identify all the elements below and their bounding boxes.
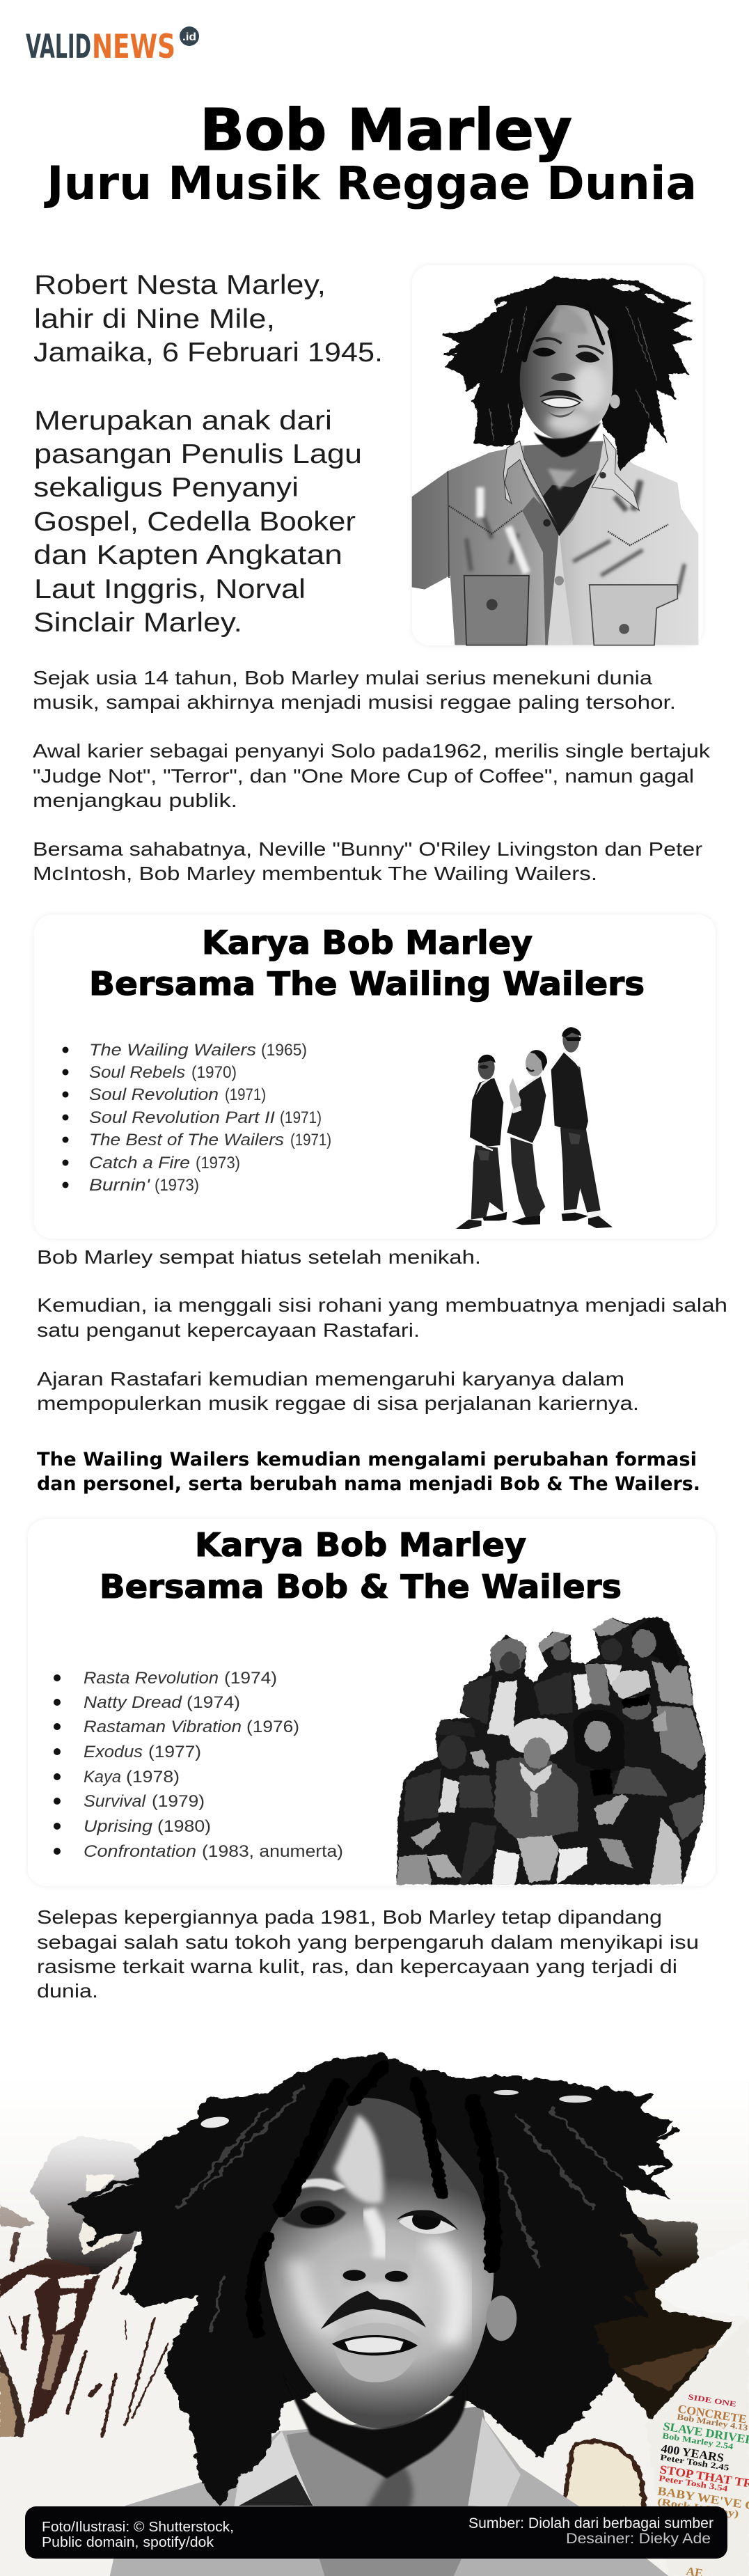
intro text block bbox=[33, 270, 383, 638]
list: Wailing Wailers albums: (1971) bbox=[225, 1085, 266, 1104]
record sleeve track list: 400 YEARS bbox=[660, 2442, 725, 2465]
intro text block: Merupakan anak dari bbox=[34, 406, 332, 436]
intro text block: Laut Inggris, Norval bbox=[34, 574, 306, 604]
list: Bob & The Wailers albums: (1974) bbox=[187, 1693, 240, 1712]
heading: Wailing Wailers works: Bersama The Wailing Wailers bbox=[89, 965, 645, 1003]
paragraph: early career: McIntosh, Bob Marley membentuk The Wailing Wailers. bbox=[33, 863, 597, 884]
list: Wailing Wailers albums: Soul Rebels bbox=[89, 1063, 185, 1082]
list: Wailing Wailers albums: The Wailing Wailers bbox=[89, 1041, 256, 1060]
paragraph: early career: musik, sampai akhirnya menjadi musisi reggae paling tersohor. bbox=[33, 691, 676, 713]
list: Wailing Wailers albums: (1965) bbox=[261, 1041, 307, 1060]
list: Wailing Wailers albums: (1970) bbox=[191, 1063, 237, 1082]
portrait photo bbox=[412, 276, 698, 645]
figure: right man bbox=[551, 1027, 613, 1228]
list: Wailing Wailers albums: Soul Revolution bbox=[89, 1085, 219, 1104]
paragraph: legacy: sebagai salah satu tokoh yang berpengaruh dalam menyikapi isu bbox=[37, 1931, 699, 1953]
record sleeve track list: CONCRETE bbox=[677, 2402, 748, 2426]
top row heads bbox=[489, 1639, 527, 1671]
heading: Bob & The Wailers works: Karya Bob Marley bbox=[195, 1526, 526, 1564]
photo: Bob & The Wailers group bbox=[397, 1617, 705, 1885]
list: Bob & The Wailers albums: Uprising bbox=[84, 1817, 153, 1836]
list: Wailing Wailers albums: Soul Revolution Part II bbox=[89, 1108, 275, 1127]
list: Wailing Wailers albums: Catch a Fire bbox=[89, 1154, 190, 1172]
panel: works with Bob & The Wailers bbox=[28, 1519, 716, 1886]
list: Bob & The Wailers albums: (1974) bbox=[224, 1669, 277, 1688]
list: Bob & The Wailers albums: Exodus bbox=[84, 1743, 143, 1761]
list: Bob & The Wailers albums: (1980) bbox=[157, 1817, 211, 1836]
bold statement: dan personel, serta berubah nama menjadi Bob & The Wailers. bbox=[37, 1473, 700, 1495]
paragraph: Rastafari bbox=[37, 1246, 727, 1414]
paragraph: Rastafari: Ajaran Rastafari kemudian memengaruhi karyanya dalam bbox=[37, 1368, 624, 1390]
hands bbox=[594, 1794, 629, 1824]
title: Bob Marley bbox=[200, 97, 572, 164]
shirt and neck bbox=[110, 2405, 668, 2576]
paragraph: legacy bbox=[37, 1906, 699, 2002]
record sleeve track list: (Rock It Baby) bbox=[656, 2497, 740, 2520]
bold statement bbox=[37, 1449, 700, 1495]
list: Bob & The Wailers albums: Natty Dread bbox=[84, 1693, 182, 1712]
mural portrait bbox=[72, 2055, 676, 2576]
list: Bob & The Wailers albums bbox=[54, 1669, 343, 1861]
list: Wailing Wailers albums: (1971) bbox=[290, 1131, 331, 1149]
footer credits bar bbox=[25, 2506, 727, 2559]
photo: The Wailing Wailers trio bbox=[456, 1027, 613, 1229]
front row heads bbox=[435, 1720, 475, 1737]
paragraph: early career bbox=[33, 667, 711, 884]
list: Wailing Wailers albums: The Best of The Wailers bbox=[89, 1131, 284, 1149]
title bbox=[44, 97, 697, 210]
heading: Bob & The Wailers works: Bersama Bob & The Wailers bbox=[100, 1568, 622, 1605]
paragraph: legacy: dunia. bbox=[37, 1980, 98, 2002]
intro text block: Jamaika, 6 Februari 1945. bbox=[33, 338, 383, 368]
front locks bbox=[253, 2067, 493, 2333]
photo credit: Foto/Ilustrasi: © Shutterstock, bbox=[42, 2520, 234, 2535]
record sleeve track list: Peter Tosh 2.45 bbox=[660, 2452, 730, 2473]
list: Wailing Wailers albums: Burnin' bbox=[89, 1176, 151, 1195]
record sleeve track list: Bob Marley 4.13 bbox=[677, 2412, 748, 2433]
intro text block: Robert Nesta Marley, bbox=[34, 270, 326, 300]
hair bbox=[72, 2055, 676, 2506]
paragraph: Rastafari: Kemudian, ia menggali sisi rohani yang membuatnya menjadi salah bbox=[37, 1294, 727, 1316]
list: Bob & The Wailers albums: Rastaman Vibration bbox=[84, 1718, 242, 1736]
paragraph: Rastafari: mempopulerkan musik reggae di sisa perjalanan kariernya. bbox=[37, 1392, 639, 1414]
paragraph: early career: "Judge Not", "Terror", dan "One More Cup of Coffee", namun gagal bbox=[33, 765, 694, 787]
source and designer: Sumber: Diolah dari berbagai sumber bbox=[468, 2515, 713, 2531]
list: Bob & The Wailers albums: Kaya bbox=[84, 1768, 121, 1786]
list: Bob & The Wailers albums: (1976) bbox=[246, 1718, 299, 1736]
list: Bob & The Wailers albums: (1979) bbox=[152, 1792, 205, 1811]
paragraph: early career: menjangkau publik. bbox=[33, 790, 237, 811]
panel: works with The Wailing Wailers bbox=[34, 915, 716, 1239]
title: Juru Musik Reggae Dunia bbox=[44, 157, 697, 210]
photo credit bbox=[42, 2520, 234, 2550]
paragraph: early career: Sejak usia 14 tahun, Bob Marley mulai serius menekuni dunia bbox=[33, 667, 652, 689]
source and designer bbox=[468, 2515, 713, 2547]
hair gaps bbox=[200, 2090, 592, 2130]
list: Bob & The Wailers albums: (1977) bbox=[148, 1743, 201, 1761]
list: Bob & The Wailers albums: Survival bbox=[84, 1792, 146, 1811]
record sleeve track list: SIDE ONE bbox=[688, 2393, 737, 2409]
figure: left man bbox=[456, 1055, 507, 1229]
intro text block: Sinclair Marley. bbox=[33, 608, 242, 638]
heading: Wailing Wailers works: Karya Bob Marley bbox=[202, 924, 533, 961]
intro text block: Gospel, Cedella Booker bbox=[33, 507, 356, 537]
heading: Bob & The Wailers works bbox=[100, 1526, 622, 1605]
illustration: Bob Marley mural with collage background bbox=[0, 2005, 749, 2576]
list: Wailing Wailers albums: (1971) bbox=[280, 1108, 322, 1127]
intro text block: sekaligus Penyanyi bbox=[33, 473, 299, 503]
list: Bob & The Wailers albums: (1978) bbox=[126, 1768, 180, 1786]
paragraph: legacy: rasisme terkait warna kulit, ras, dan kepercayaan yang terjadi di bbox=[37, 1956, 677, 1977]
paragraph: early career: Bersama sahabatnya, Neville "Bunny" O'Riley Livingston dan Peter bbox=[33, 838, 702, 860]
list: Wailing Wailers albums bbox=[63, 1041, 331, 1195]
intro text block: pasangan Penulis Lagu bbox=[34, 439, 362, 469]
paragraph: Rastafari: satu penganut kepercayaan Rastafari. bbox=[37, 1319, 420, 1341]
paragraph: legacy: Selepas kepergiannya pada 1981, Bob Marley tetap dipandang bbox=[37, 1906, 662, 1928]
record sleeve track list: Bob Marley 2.54 bbox=[662, 2430, 734, 2451]
collage background bbox=[0, 2005, 749, 2576]
clothing highlights bbox=[487, 1680, 517, 1736]
paragraph: early career: Awal karier sebagai penyanyi Solo pada1962, merilis single bertajuk bbox=[33, 740, 711, 762]
photo credit: Public domain, spotify/dok bbox=[42, 2535, 214, 2550]
bold statement: The Wailing Wailers kemudian mengalami perubahan formasi bbox=[37, 1449, 697, 1470]
intro text block: dan Kapten Angkatan bbox=[33, 540, 342, 570]
list: Bob & The Wailers albums: (1983, anumerta) bbox=[202, 1842, 343, 1861]
logo: Validnews.id: NEWS bbox=[92, 28, 175, 66]
list: Wailing Wailers albums: (1973) bbox=[196, 1154, 240, 1172]
list: Bob & The Wailers albums: Confrontation bbox=[84, 1842, 196, 1861]
list: Bob & The Wailers albums: Rasta Revolution bbox=[84, 1669, 219, 1688]
record sleeve track list: Peter Tosh 3.54 bbox=[659, 2473, 728, 2494]
panel: portrait card bbox=[412, 265, 703, 645]
intro text block: lahir di Nine Mile, bbox=[34, 304, 275, 334]
face bbox=[265, 2098, 517, 2479]
paragraph: Rastafari: Bob Marley sempat hiatus setelah menikah. bbox=[37, 1246, 481, 1268]
middle man with sunglasses bbox=[610, 1671, 651, 1700]
list: Wailing Wailers albums: (1973) bbox=[155, 1176, 199, 1195]
record sleeve track list: SLAVE DRIVER bbox=[662, 2419, 749, 2447]
logo: Validnews.id: .id bbox=[182, 31, 196, 43]
figure: middle man bbox=[507, 1050, 547, 1225]
record sleeve track list bbox=[656, 2393, 749, 2576]
source and designer: Desainer: Dieky Ade bbox=[566, 2531, 711, 2547]
logo: Validnews.id: VALID bbox=[26, 28, 91, 66]
heading: Wailing Wailers works bbox=[89, 924, 645, 1003]
logo: Validnews.id bbox=[26, 26, 199, 66]
